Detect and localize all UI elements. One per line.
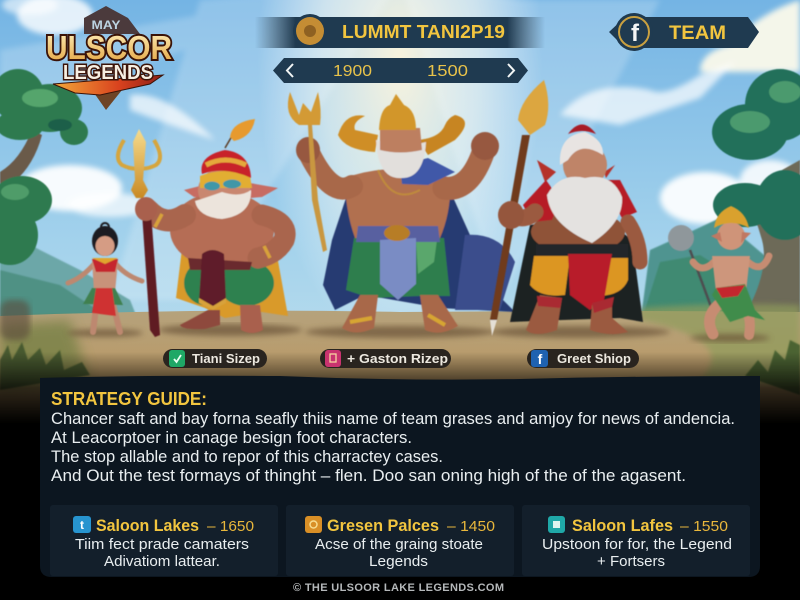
trident centre	[131, 129, 148, 198]
black cape	[510, 215, 643, 322]
face	[563, 143, 607, 187]
pill: Tiani Sizep	[163, 349, 267, 368]
pill: Greet Shiop: Greet Shiop	[557, 351, 631, 366]
waist sash	[356, 226, 440, 242]
boy head	[717, 222, 745, 250]
white beard	[376, 140, 426, 178]
gold belt buckle	[384, 225, 410, 241]
navy cape	[323, 170, 515, 312]
strategy body text: Chancer saft and bay forna seafly thiis name of team grases and amjoy for news of andencia.	[51, 410, 735, 428]
trident head	[288, 92, 321, 125]
strategy body text	[51, 410, 735, 485]
gold crown	[714, 206, 749, 228]
left trees	[0, 69, 88, 265]
spear shaft	[490, 135, 530, 320]
sky background	[0, 0, 800, 440]
strategy body text: And Out the test formays of thinght – flen. Doo san oning high of the of the agasent.	[51, 467, 686, 485]
card: Saloon Lafes 1550: + Fortsers	[597, 554, 665, 570]
card: Saloon Lakes 1650	[50, 505, 278, 576]
mace staff	[690, 250, 713, 312]
gold horns	[338, 115, 378, 152]
pill: Greet Shiop: f	[538, 351, 543, 367]
year selector bar: 1500	[427, 63, 468, 80]
team badge: f	[631, 20, 640, 47]
red cap	[568, 124, 596, 134]
white hair	[560, 132, 603, 165]
game logo: LEGENDS	[63, 62, 153, 84]
card: Saloon Lakes 1650: – 1650	[207, 519, 254, 535]
pill: Greet Shiop	[527, 349, 639, 368]
green trousers	[184, 260, 274, 306]
legs and feet	[180, 310, 220, 329]
clouds	[2, 0, 800, 224]
top title banner	[255, 14, 545, 48]
arms	[310, 150, 484, 189]
card: Saloon Lakes 1650: Adivatiom lattear.	[104, 554, 220, 570]
ears	[184, 183, 278, 198]
trident staff	[308, 125, 327, 252]
white beard	[195, 190, 251, 219]
ground	[0, 311, 800, 440]
card: Gresen Palces 1450: – 1450	[447, 519, 495, 535]
grass tufts	[0, 340, 800, 395]
gold bracelets and tattoo	[155, 214, 270, 258]
top title banner: LUMMT TANI2P19	[342, 22, 505, 42]
team badge	[609, 13, 759, 51]
fists	[296, 132, 499, 163]
game logo: ULSCOR	[46, 29, 172, 66]
torso	[170, 192, 274, 268]
strategy heading: STRATEGY GUIDE:	[51, 389, 207, 409]
character: red-turbaned warrior	[118, 119, 288, 337]
card: Saloon Lakes 1650: Tiim fect prade camaters	[75, 537, 249, 553]
pill: Gaston Rizep: + Gaston Rizep	[347, 351, 448, 366]
strategy body text: The stop allable and to repor of this charractey cases.	[51, 448, 443, 466]
distant mountains	[0, 218, 780, 325]
ground shadows	[67, 324, 770, 342]
shins and feet	[526, 295, 562, 334]
coin icon	[293, 14, 327, 48]
green trousers	[346, 238, 450, 298]
strategy panel	[40, 376, 760, 577]
game logo	[46, 6, 172, 110]
character: small girl	[68, 223, 142, 332]
green skirt	[712, 284, 765, 322]
arms	[512, 212, 640, 262]
card: Gresen Palces 1450: Gresen Palces	[327, 517, 439, 535]
leaf feather	[225, 136, 232, 148]
character: small boy with mace	[668, 206, 769, 335]
game logo: MAY	[92, 18, 120, 32]
card: Gresen Palces 1450	[286, 505, 514, 576]
trident head	[118, 140, 160, 169]
belt	[188, 258, 252, 270]
bare belly	[531, 210, 625, 254]
strategy body text: At Leacorptoer in canage besign foot characters.	[51, 429, 412, 447]
legs and sandals	[342, 295, 378, 332]
card: Gresen Palces 1450: Legends	[369, 554, 428, 570]
orange cape	[176, 230, 288, 318]
year selector bar	[273, 58, 528, 83]
dark fade to black	[0, 352, 800, 424]
limbs	[693, 256, 769, 335]
card: Saloon Lafes 1550: Upstoon for for, the Legend	[542, 537, 732, 553]
boy torso	[712, 256, 750, 292]
gold necklace	[378, 170, 420, 194]
trident staff	[141, 198, 160, 337]
character: white-bearded elder	[490, 80, 643, 336]
mace head	[668, 225, 694, 251]
arms	[148, 210, 285, 258]
torso	[345, 169, 450, 238]
red turban	[201, 150, 251, 178]
character: central crowned king	[288, 92, 515, 333]
face	[198, 168, 250, 212]
card: Gresen Palces 1450: Acse of the graing stoate	[315, 537, 483, 553]
red tunic shoulders	[523, 180, 637, 222]
spear head	[518, 80, 548, 135]
belt	[536, 244, 628, 258]
card: Saloon Lafes 1550	[522, 505, 750, 576]
red centre cloth	[568, 254, 612, 310]
pointed red ears	[537, 160, 615, 182]
card: Saloon Lakes 1650: Saloon Lakes	[96, 517, 199, 535]
face	[380, 128, 422, 152]
right trees	[712, 69, 800, 315]
pill: Gaston Rizep	[320, 349, 451, 368]
pill: Tiani Sizep: Tiani Sizep	[192, 351, 260, 366]
year selector bar: 1900	[333, 63, 372, 80]
gripping hand	[135, 197, 157, 221]
card: Saloon Lakes 1650: t	[80, 518, 84, 532]
gripping hand	[498, 201, 524, 229]
footer copyright: © THE ULSOOR LAKE LEGENDS.COM	[293, 582, 504, 594]
team badge: TEAM	[669, 23, 726, 44]
blue shawl	[400, 158, 455, 185]
long white beard	[547, 177, 622, 243]
card: Saloon Lafes 1550: Saloon Lafes	[572, 517, 673, 535]
blue front panel	[380, 238, 416, 300]
card: Saloon Lafes 1550: – 1550	[680, 519, 728, 535]
orange trousers	[530, 256, 628, 296]
gold crown	[379, 94, 416, 130]
